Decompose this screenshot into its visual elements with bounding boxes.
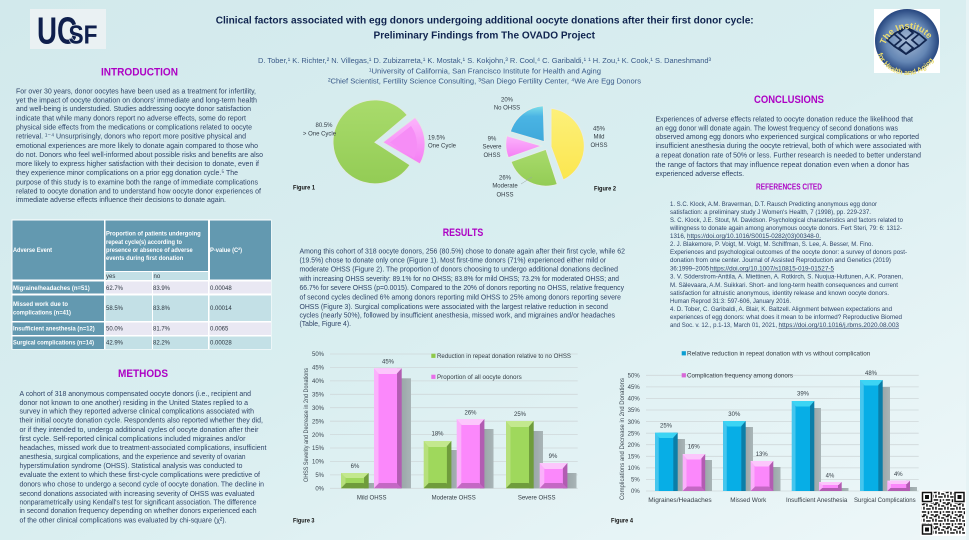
text block: results: (Table, Figure 4). <box>300 319 351 328</box>
text block: methods: donor not known to one another) residing in the United States replied to a <box>20 398 249 407</box>
pie chart: figure 2: 45% <box>593 126 606 132</box>
text block: results: (19.5%) chose to donate only once (Figure 1). Most first-time donors (71%) experienced either mild or <box>300 256 606 264</box>
logo: The Institute for Health and Aging <box>874 9 940 75</box>
bar chart: figure 4: Surgical Complications <box>854 498 916 504</box>
text block: introduction: they experience minor complications on a prior egg donation cycle.⁵ The <box>16 168 238 177</box>
label: figure 1: Figure 1 <box>293 186 316 192</box>
table: adverse events: events during first donation <box>106 256 184 262</box>
text block: methods <box>20 389 267 524</box>
table: adverse events: Missed work due to <box>13 302 68 308</box>
text block: introduction: more likely to express higher satisfaction with their decision to donate, even if <box>16 159 260 168</box>
text block: conclusions: an egg donor will donate again. The lowest frequency of second donations was <box>656 124 898 132</box>
text block: references: donation from one center. Journal of Assisted Reproduction and Genetics (2019) <box>670 257 891 264</box>
text block: references: satisfaction: a preliminary study J Women's Health, 7 (1998), pp. 229-237. <box>670 209 871 216</box>
pie chart: figure 1: > One Cycle <box>303 132 337 138</box>
logo: The Institute for Health and Aging: for Health and Aging <box>878 52 934 75</box>
pie chart: figure 2: Moderate <box>492 184 518 190</box>
text block: references: S. C. Klock, J.E. Stout, M. Davidson. Psychological characteristics and factors related to <box>670 217 904 224</box>
text block: methods: headaches, missed work due to treatment-associated complications, insufficient <box>20 443 267 452</box>
bar chart: figure 4: 4% <box>894 472 903 478</box>
bar chart: figure 4: Complications and Decrease in 2nd Donations <box>620 378 626 500</box>
bar chart: figure 4: 5% <box>631 478 640 484</box>
heading: results: RESULTS <box>443 227 483 239</box>
text block: methods: anesthesia, surgical complications, and the experience and severity of ovarian <box>20 452 246 461</box>
authors and affiliations <box>258 56 711 86</box>
text block: references: https://doi.org/10.1007/s10815-019-01527-5 <box>710 266 835 272</box>
bar chart: figure 4: Migraines/Headaches <box>648 498 712 504</box>
bar chart: figure 4: 20% <box>628 443 640 449</box>
pie chart: figure 1 <box>303 100 457 184</box>
text block: introduction: physical side effects from the medications or complications related to oocyte <box>16 123 252 132</box>
table: adverse events: 83.8% <box>153 306 171 312</box>
title <box>216 15 754 41</box>
text block: methods: evaluate the extent to which these first-cycle complications were predictive of <box>20 470 261 479</box>
text block: references: M. Sälevaara, A.M. Suikkari. Short- and long-term health consequences and current <box>670 282 898 289</box>
icon: QR code <box>920 490 966 536</box>
table: adverse events: Adverse Event <box>13 248 52 254</box>
text block: introduction: indicate that while many donors report no adverse effects, some do report <box>16 114 247 123</box>
text block: introduction: immediate adverse effects influence their decisions to donate again. <box>16 195 226 204</box>
bar chart: figure 3: 45% <box>382 360 395 366</box>
bar chart: figure 3: 0% <box>315 486 325 492</box>
text block: results: with increasing OHSS severity: 89.1% for no OHSS; 83.8% for mild OHSS; 73.2% for moderated OHSS; and <box>299 274 619 283</box>
text block: introduction: emotional experiences are more likely to donate again compared to those who <box>16 141 258 150</box>
table: adverse events: 0.0065 <box>210 326 229 332</box>
bar chart: figure 3: 9% <box>549 454 558 460</box>
text block: conclusions: observed among egg donors who experienced surgical complications or who reported <box>656 132 919 141</box>
text block: conclusions <box>656 114 921 178</box>
bars: insufficient anesthesia <box>792 401 848 491</box>
text block: conclusions: a repeat donation rate of 50% or less. Further research is needed to better understand <box>656 150 921 160</box>
pie chart: figure 2 <box>482 98 608 198</box>
text block: results <box>299 246 625 328</box>
bar chart: figure 4: Missed Work <box>730 498 767 504</box>
bar chart: figure 4: 25% <box>660 424 673 430</box>
bar chart: figure 3: 30% <box>312 406 325 412</box>
table: adverse events: no <box>154 274 161 280</box>
text block: methods: in second donation frequency depending on whether donors experienced each <box>20 506 256 515</box>
text block: references: experiences of egg donors: what does it mean to be informed? Reproductive Biomed <box>670 314 903 321</box>
table: adverse events: 62.7% <box>106 286 124 292</box>
text block: references <box>669 201 907 329</box>
bar chart: figure 3: 40% <box>312 379 325 385</box>
table: adverse events: 82.2% <box>153 340 171 346</box>
text block: introduction: purpose of this study is to examine both the range of immediate complications <box>16 178 258 186</box>
pie chart: figure 2: 20% <box>501 98 514 104</box>
text block: introduction: do not. Donors who feel well-informed about possible risks and benefits are also <box>16 150 263 159</box>
bar chart: figure 3: 15% <box>312 446 325 452</box>
text block: results: OHSS (Figure 3). Surgical complications were associated with the largest relative reduction in second <box>300 302 608 311</box>
bar chart: figure 4: 16% <box>688 444 700 450</box>
text block: references: 36:1999–2005 <box>670 266 710 272</box>
pie chart: figure 2: OHSS <box>590 143 608 149</box>
table: adverse events: 58.5% <box>106 306 124 312</box>
text block: references: https://doi.org/10.1016/j.rbms.2020.08.003 <box>778 322 900 329</box>
bar chart: figure 3: Mild OHSS <box>357 496 387 502</box>
authors and affiliations: ¹University of California, San Francisco Institute for Health and Aging <box>369 66 601 76</box>
authors and affiliations: D. Tober,¹ K. Richter,² N. Villegas,¹ D. Zubizarreta,¹ K. Mostak,¹ S. Kokjohn,³ R. Cool,⁴ C. Garibaldi,¹ ¹ H. Zou,¹ K. Cook,¹ S. Daneshmand³ <box>258 56 711 65</box>
text block: methods: survey in which they reported adverse clinical complications associated with <box>20 406 254 416</box>
table: adverse events: complications (n=41) <box>13 310 71 316</box>
bar chart: figure 4: 35% <box>628 408 640 414</box>
table: adverse events: P-value (C²) <box>210 247 242 254</box>
legend: figure 4: Complication frequency among donors <box>687 374 793 380</box>
legend: figure 4: Relative reduction in repeat donation with vs without complication <box>687 352 870 358</box>
table: adverse events: 42.9% <box>106 340 124 346</box>
heading: conclusions: CONCLUSIONS <box>754 94 824 106</box>
table: adverse events: Proportion of patients undergoing <box>106 232 201 238</box>
bar chart: figure 4: 10% <box>628 466 640 472</box>
text block: conclusions: insufficient anesthesia during the oocyte retrieval, both of which were associated with <box>656 141 921 150</box>
heading: introduction: INTRODUCTION <box>101 66 178 78</box>
text block: conclusions: Experiences of adverse effects related to oocyte donation reduce the likelihood that <box>656 114 914 124</box>
pie chart: figure 2: 26% <box>499 176 512 182</box>
pie chart: figure 2: Mild <box>593 134 605 140</box>
bar chart: figure 3: 6% <box>351 464 360 470</box>
bar chart: figure 3: 35% <box>312 392 325 398</box>
bar chart: figure 4: Insufficient Anesthesia <box>786 498 848 504</box>
bar chart: figure 4: 45% <box>628 385 640 391</box>
legend: figure 3: Proportion of all oocyte donors <box>437 375 522 381</box>
table: adverse events: presence or absence of adverse <box>106 248 193 254</box>
text block: references: 1. S.C. Klock, A.M. Braverman, D.T. Rausch Predicting anonymous egg donor <box>670 201 877 208</box>
pie chart: figure 2: OHSS <box>483 153 501 159</box>
text block: methods: first cycle. Self-reported clinical complications included migraines and/or <box>20 434 246 443</box>
bar chart: figure 3: 10% <box>312 460 325 466</box>
bar chart: figure 4: 50% <box>628 374 640 380</box>
legend: figure 3: Reduction in repeat donation relative to no OHSS <box>437 354 571 360</box>
bar chart: figure 4: 39% <box>797 392 810 398</box>
text block: results: 66.7% for severe OHSS (p=0.0015). Compared to the 20% of donors reporting no OHSS, relative frequency <box>300 283 624 292</box>
text block: results: Among this cohort of 318 oocyte donors, 256 (80.5%) chose to donate again after their first cycle, while 62 <box>300 246 625 256</box>
bar chart: figure 3: Moderate OHSS <box>432 496 476 502</box>
text block: references: https://doi.org/10.1016/S0015-0282(03)00348-0. <box>687 233 821 240</box>
bar chart: figure 3: 5% <box>315 473 325 479</box>
text block: methods: or if they intended to, undergo additional cycles of oocyte donation after their <box>20 425 259 434</box>
text block: references: satisfaction for altruistic anonymous, identity release and known oocyte donors. <box>670 290 889 297</box>
label: figure 4: Figure 4 <box>611 518 634 524</box>
text block: introduction: related to oocyte donation and to understand how oocyte donor experiences of <box>16 186 262 196</box>
text block: methods: hyperstimulation syndrome (OHSS). Statistical analysis was conducted to <box>20 461 242 470</box>
authors and affiliations: ²Chief Scientist, Fertility Science Consulting, ³San Diego Fertility Center, ⁴We Are Egg Donors <box>328 76 641 86</box>
text block: methods: A cohort of 318 anonymous compensated oocyte donors (i.e., recipient and <box>20 389 251 398</box>
text block: introduction: For over 30 years, donor oocytes have been used as a treatment for infertility, <box>16 87 256 96</box>
text block: references: willingness to donate again among anonymous oocyte donors. Fert Steri, 79: 6: 1312- <box>669 225 902 232</box>
bar chart: figure 3: 26% <box>464 410 477 416</box>
text block: methods: nonparametrically using Kendall's test for significant association. The difference <box>20 498 256 506</box>
heading: methods: METHODS <box>118 368 168 380</box>
bar chart: figure 4: 25% <box>628 431 640 437</box>
bar chart: figure 4 <box>620 351 919 504</box>
text block: introduction: yet the impact of oocyte donation on donors' immediate and long-term health <box>16 96 257 105</box>
pie chart: figure 2: OHSS <box>496 192 514 198</box>
bar chart: figure 3: Severe OHSS <box>518 496 556 502</box>
text block: references: 3. V. Söderstrom-Anttila, A. Miettinen, A. Rotkirch, S. Nuojua-Huttunen, A.K. Poranen, <box>670 274 903 280</box>
text block: conclusions: the range of factors that may influence repeat donation even when a donor has <box>656 160 909 169</box>
logo: The Institute for Health and Aging: The Institute <box>880 22 932 44</box>
text block: introduction <box>16 87 263 204</box>
bar chart: figure 4: 15% <box>628 454 640 460</box>
bar chart: figure 3: 25% <box>514 412 527 418</box>
bars: migraines/headaches <box>655 433 712 491</box>
table: adverse events: 0.00048 <box>210 286 232 292</box>
text block: references: Human Reprod 31:3: 597-606, January 2016. <box>670 298 791 305</box>
table: adverse events: repeat cycle(s) according to <box>106 240 182 246</box>
table: adverse events: 81.7% <box>153 326 171 332</box>
bar chart: figure 3: 18% <box>431 432 444 438</box>
table: adverse events: 83.9% <box>153 286 171 292</box>
pie chart: figure 1: One Cycle <box>428 144 457 150</box>
bar chart: figure 4: 4% <box>826 474 835 480</box>
table: adverse events: 0.00028 <box>210 340 232 346</box>
table: adverse events: 50.0% <box>106 326 124 332</box>
bar chart: figure 4: 48% <box>865 371 878 377</box>
text block: references: and Soc. v. 12., p.1-13, March 01, 2021, <box>670 322 777 329</box>
table: adverse events: Surgical complications (n=14) <box>13 340 94 346</box>
legend: figure 3 <box>431 354 571 381</box>
logo: UCSF: UC <box>37 10 77 52</box>
label: figure 2: Figure 2 <box>594 186 617 192</box>
legend: figure 4 <box>682 351 870 380</box>
table: adverse events: 0.00014 <box>210 306 232 312</box>
bars: surgical complications <box>860 380 917 491</box>
text block: methods: donors who chose to undergo a second cycle of oocyte donation. The decline in <box>20 480 264 488</box>
pie chart: figure 1: 19.5% <box>428 136 446 142</box>
text block: references: 4. D. Tober, C. Garibaldi, A. Blair, K. Baltzell. Alignment between expectations and <box>670 306 893 313</box>
bar chart: figure 3 <box>304 352 578 502</box>
text block: results: of second cycles declined 6% among donors reporting mild OHSS to 25% among donors reporting severe <box>300 292 621 302</box>
table: adverse events: Migraine/headaches (n=51) <box>13 286 90 292</box>
pie chart: figure 2: No OHSS <box>494 106 520 112</box>
text block: references: 1316, <box>670 233 686 240</box>
bar chart: figure 4: 0% <box>631 489 640 495</box>
bars: moderate OHSS <box>424 419 494 488</box>
bar chart: figure 3: 45% <box>312 366 325 372</box>
bar chart: figure 3: 25% <box>312 419 325 425</box>
text block: results: cycles (nearly 50%), followed by insufficient anesthesia, missed work, and migraines and/or headaches <box>300 310 615 320</box>
bars: missed work <box>723 421 780 491</box>
text block: references: 2. J. Blakemore, P. Voigt, M. Voigt, M. Schiffman, S. Lee, A. Besser, M. Fino. <box>670 241 873 248</box>
bar chart: figure 4: 30% <box>628 420 640 426</box>
bar chart: figure 4: 30% <box>728 412 741 418</box>
text block: methods: second donations associated with increasing severity of OHSS was evaluated <box>20 489 254 498</box>
pie chart: figure 2: Severe <box>482 144 502 150</box>
text block: references: Experiences and psychological outcomes of the oocyte donor: a survey of donors post- <box>670 249 907 256</box>
pie chart: figure 1: 80.5% <box>315 123 333 129</box>
bar chart: figure 4: 40% <box>628 397 640 403</box>
bar chart: figure 4: 13% <box>756 452 768 458</box>
bar chart: figure 3: 50% <box>312 352 325 358</box>
bars: mild OHSS <box>341 368 411 488</box>
bar chart: figure 3: OHSS Severity and Decrease in 2nd Donations <box>304 368 310 482</box>
text block: methods: of the other clinical complications was evaluated by chi-square (χ²). <box>20 516 226 524</box>
pie chart: figure 2: 9% <box>488 136 497 142</box>
label: figure 3: Figure 3 <box>293 518 315 524</box>
logo: UCSF: SF <box>68 20 98 50</box>
text block: methods: their initial oocyte donation cycle. Respondents also reported whether they did, <box>20 416 263 424</box>
table: adverse events <box>12 220 272 350</box>
table: adverse events: Insufficient anesthesia (n=12) <box>13 326 95 332</box>
title: Preliminary Findings from The OVADO Project <box>374 29 595 41</box>
table: adverse events: yes <box>106 274 115 280</box>
text block: introduction: retrieval. ¹⁻⁴ Unsurprisingly, donors who report more positive physical and <box>16 132 246 141</box>
text block: introduction: and well-being is understudied. Studies addressing oocyte donor satisfaction <box>16 104 251 113</box>
text block: conclusions: experienced adverse effects. <box>656 169 744 178</box>
bar chart: figure 3: 20% <box>312 433 325 439</box>
title: Clinical factors associated with egg donors undergoing additional oocyte donations after their first donor cycle: <box>216 15 754 27</box>
bars: severe OHSS <box>506 421 576 488</box>
text block: results: moderate OHSS (Figure 2). The proportion of donors choosing to undergo additional donations declined <box>300 264 618 274</box>
heading: references cited: REFERENCES CITED <box>756 183 822 192</box>
